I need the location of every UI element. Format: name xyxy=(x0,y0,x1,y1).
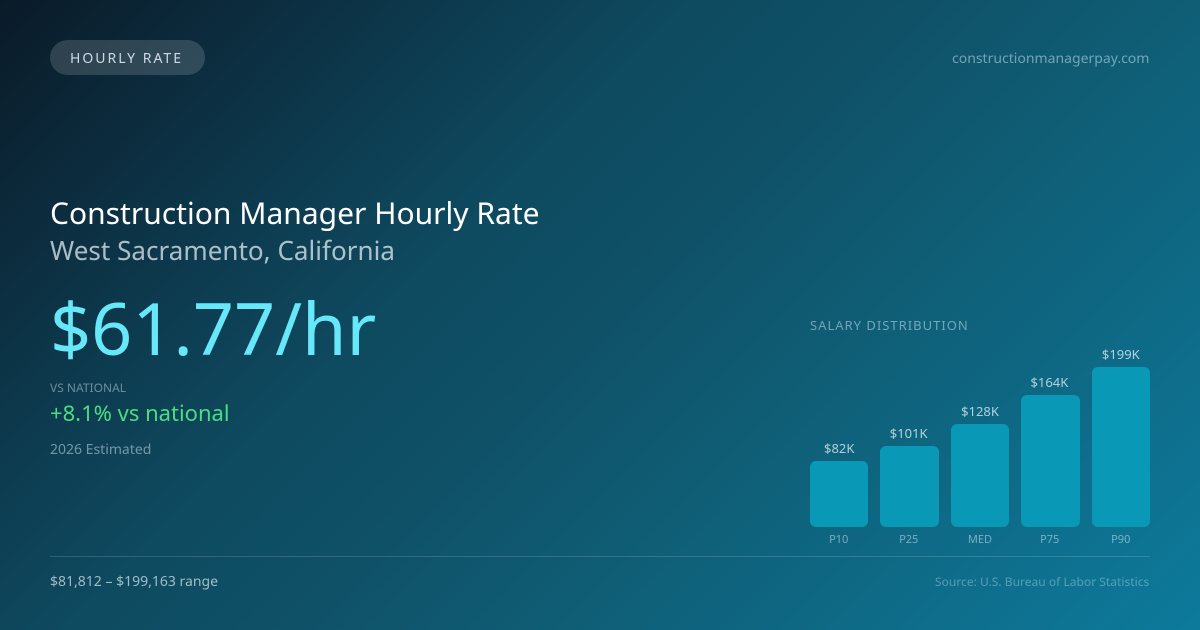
site domain: constructionmanagerpay.com xyxy=(952,49,1149,68)
label MED: MED xyxy=(968,532,992,547)
label P90: P90 xyxy=(1111,532,1130,547)
national comparison: +8.1% vs national xyxy=(50,398,230,428)
bar P10 xyxy=(810,461,868,527)
value P25: $101K xyxy=(890,424,928,442)
title: Construction Manager Hourly Rate xyxy=(50,192,540,233)
value P90: $199K xyxy=(1102,345,1140,363)
headline hourly rate: $61.77/hr xyxy=(50,279,376,377)
badge: hourly rate xyxy=(50,40,205,75)
bar MED xyxy=(951,424,1009,527)
bar P75 xyxy=(1021,395,1080,527)
value P75: $164K xyxy=(1030,373,1068,391)
label P25: P25 xyxy=(899,532,918,547)
value MED: $128K xyxy=(961,402,999,420)
label P10: P10 xyxy=(829,532,848,547)
badge label: HOURLY RATE xyxy=(70,49,183,68)
salary range: $81,812 – $199,163 range xyxy=(50,572,218,591)
bar P25 xyxy=(880,446,939,527)
label P75: P75 xyxy=(1040,532,1059,547)
bar P90 xyxy=(1092,367,1150,527)
source: Source: U.S. Bureau of Labor Statistics xyxy=(935,573,1149,590)
value P10: $82K xyxy=(824,439,854,457)
chart heading: SALARY DISTRIBUTION xyxy=(810,316,969,334)
subtitle: location: West Sacramento, California xyxy=(50,232,395,268)
label: vs national: VS NATIONAL xyxy=(50,379,126,396)
estimate year: 2026 Estimated xyxy=(50,440,151,459)
